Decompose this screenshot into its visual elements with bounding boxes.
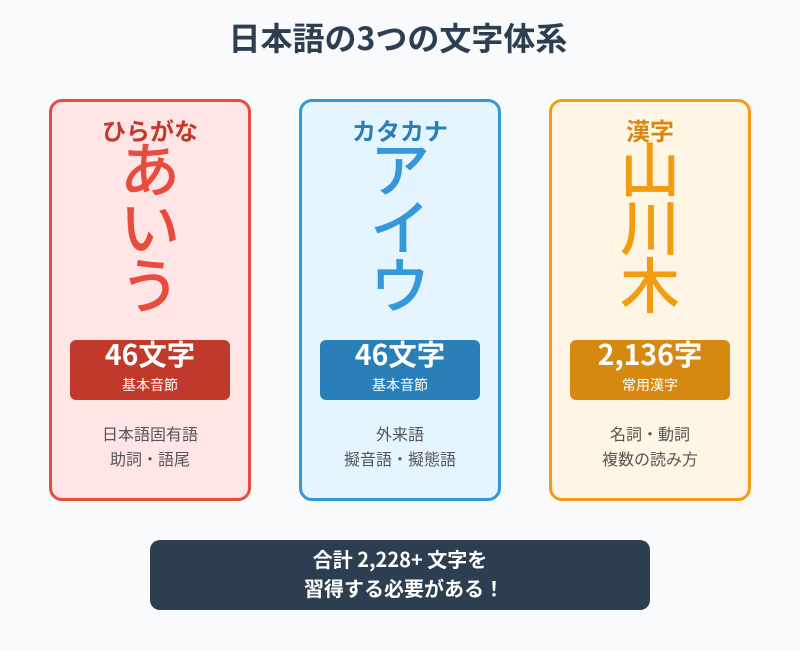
title: 日本語の3つの文字体系 xyxy=(229,14,567,60)
description: kanji uses xyxy=(602,421,698,470)
callout: total: 習得する必要がある！ xyxy=(304,573,504,602)
panel: hiragana xyxy=(49,99,251,501)
glyphs: katakana samples: イ xyxy=(370,181,430,268)
heading: katakana: カタカナ xyxy=(352,112,448,147)
glyphs: katakana samples xyxy=(370,123,430,326)
glyphs: kanji samples xyxy=(620,123,680,326)
description: katakana uses xyxy=(344,421,456,470)
description: katakana uses: 擬音語・擬態語 xyxy=(344,446,456,470)
glyphs: hiragana samples: い xyxy=(120,181,180,268)
description: kanji uses: 名詞・動詞 xyxy=(610,421,690,445)
glyphs: hiragana samples: あ xyxy=(120,123,180,210)
heading: kanji: 漢字 xyxy=(626,112,674,147)
callout: total xyxy=(150,540,650,610)
glyphs: hiragana samples xyxy=(120,123,180,326)
description: hiragana uses xyxy=(102,421,198,470)
glyphs: katakana samples: ウ xyxy=(370,239,430,326)
badge: hiragana count xyxy=(70,340,230,400)
panel: katakana xyxy=(299,99,501,501)
panel: kanji xyxy=(549,99,751,501)
heading: hiragana: ひらがな xyxy=(102,112,198,147)
glyphs: kanji samples: 山 xyxy=(620,123,680,210)
count caption: 常用漢字 xyxy=(622,375,678,395)
count caption: 基本音節 xyxy=(372,375,428,395)
count: 2,136字 xyxy=(598,333,702,374)
count: 46文字 xyxy=(355,333,445,374)
glyphs: kanji samples: 木 xyxy=(620,239,680,326)
description: hiragana uses: 日本語固有語 xyxy=(102,421,198,445)
description: kanji uses: 複数の読み方 xyxy=(602,446,698,470)
glyphs: katakana samples: ア xyxy=(370,123,430,210)
glyphs: kanji samples: 川 xyxy=(620,181,680,268)
badge: katakana count xyxy=(320,340,480,400)
count: 46文字 xyxy=(105,333,195,374)
glyphs: hiragana samples: う xyxy=(120,239,180,326)
badge: kanji count xyxy=(570,340,730,400)
count caption: 基本音節 xyxy=(122,375,178,395)
callout: total: 合計 2,228+ 文字を xyxy=(313,544,487,573)
description: katakana uses: 外来語 xyxy=(376,421,424,445)
description: hiragana uses: 助詞・語尾 xyxy=(110,446,190,470)
